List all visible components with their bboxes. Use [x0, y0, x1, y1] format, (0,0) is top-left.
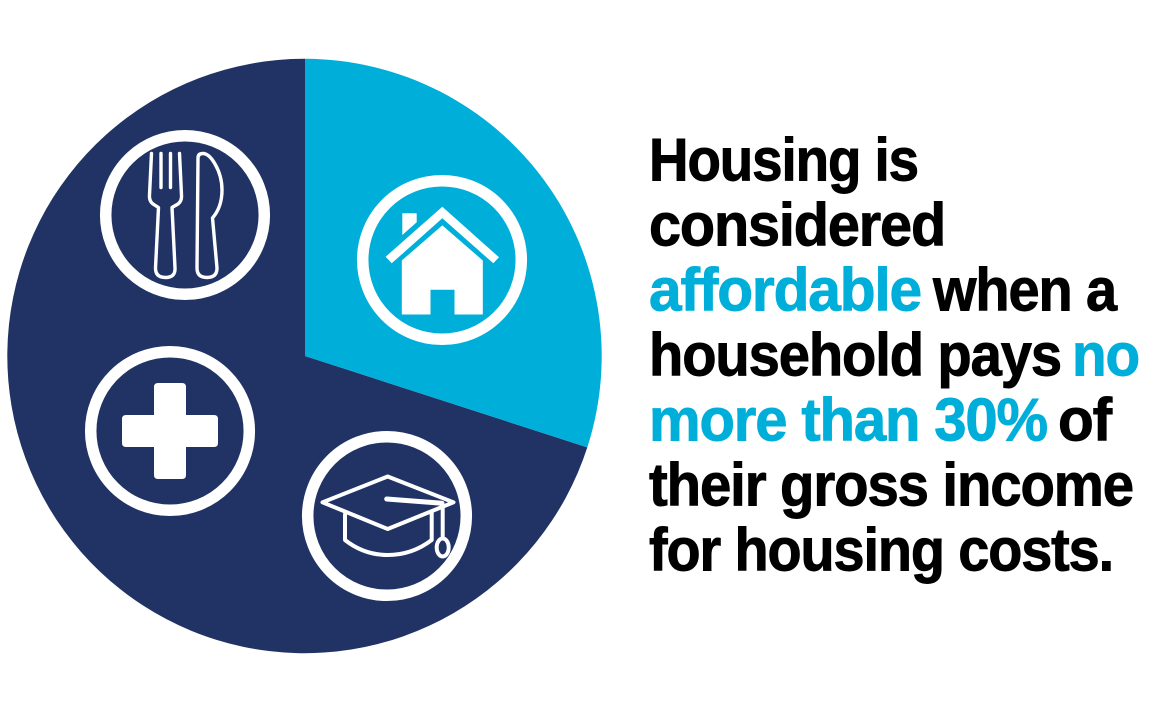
text block: affordability statement: when a [932, 255, 1118, 323]
text block: affordability statement: of [1058, 385, 1113, 453]
text block: affordability statement: their gross income [649, 450, 1133, 518]
icon: fork and knife [106, 136, 264, 294]
pie slice: other costs 70% [7, 59, 587, 653]
icon: house [363, 181, 521, 339]
text block: affordability statement: no [1072, 320, 1139, 388]
text block: affordability statement: considered [649, 190, 945, 258]
text block: affordability statement: more than 30% [649, 385, 1047, 453]
text block: affordability statement [649, 125, 1139, 583]
text block: affordability statement: for housing costs. [649, 515, 1113, 583]
text block: affordability statement: Housing is [649, 125, 918, 193]
text block: affordability statement: household pays [649, 320, 1061, 388]
icon: medical cross [91, 352, 249, 510]
icon: graduation cap [308, 437, 466, 595]
text block: affordability statement: affordable [649, 255, 921, 323]
pie slice: housing 30% [305, 59, 602, 447]
pie chart [7, 59, 602, 653]
